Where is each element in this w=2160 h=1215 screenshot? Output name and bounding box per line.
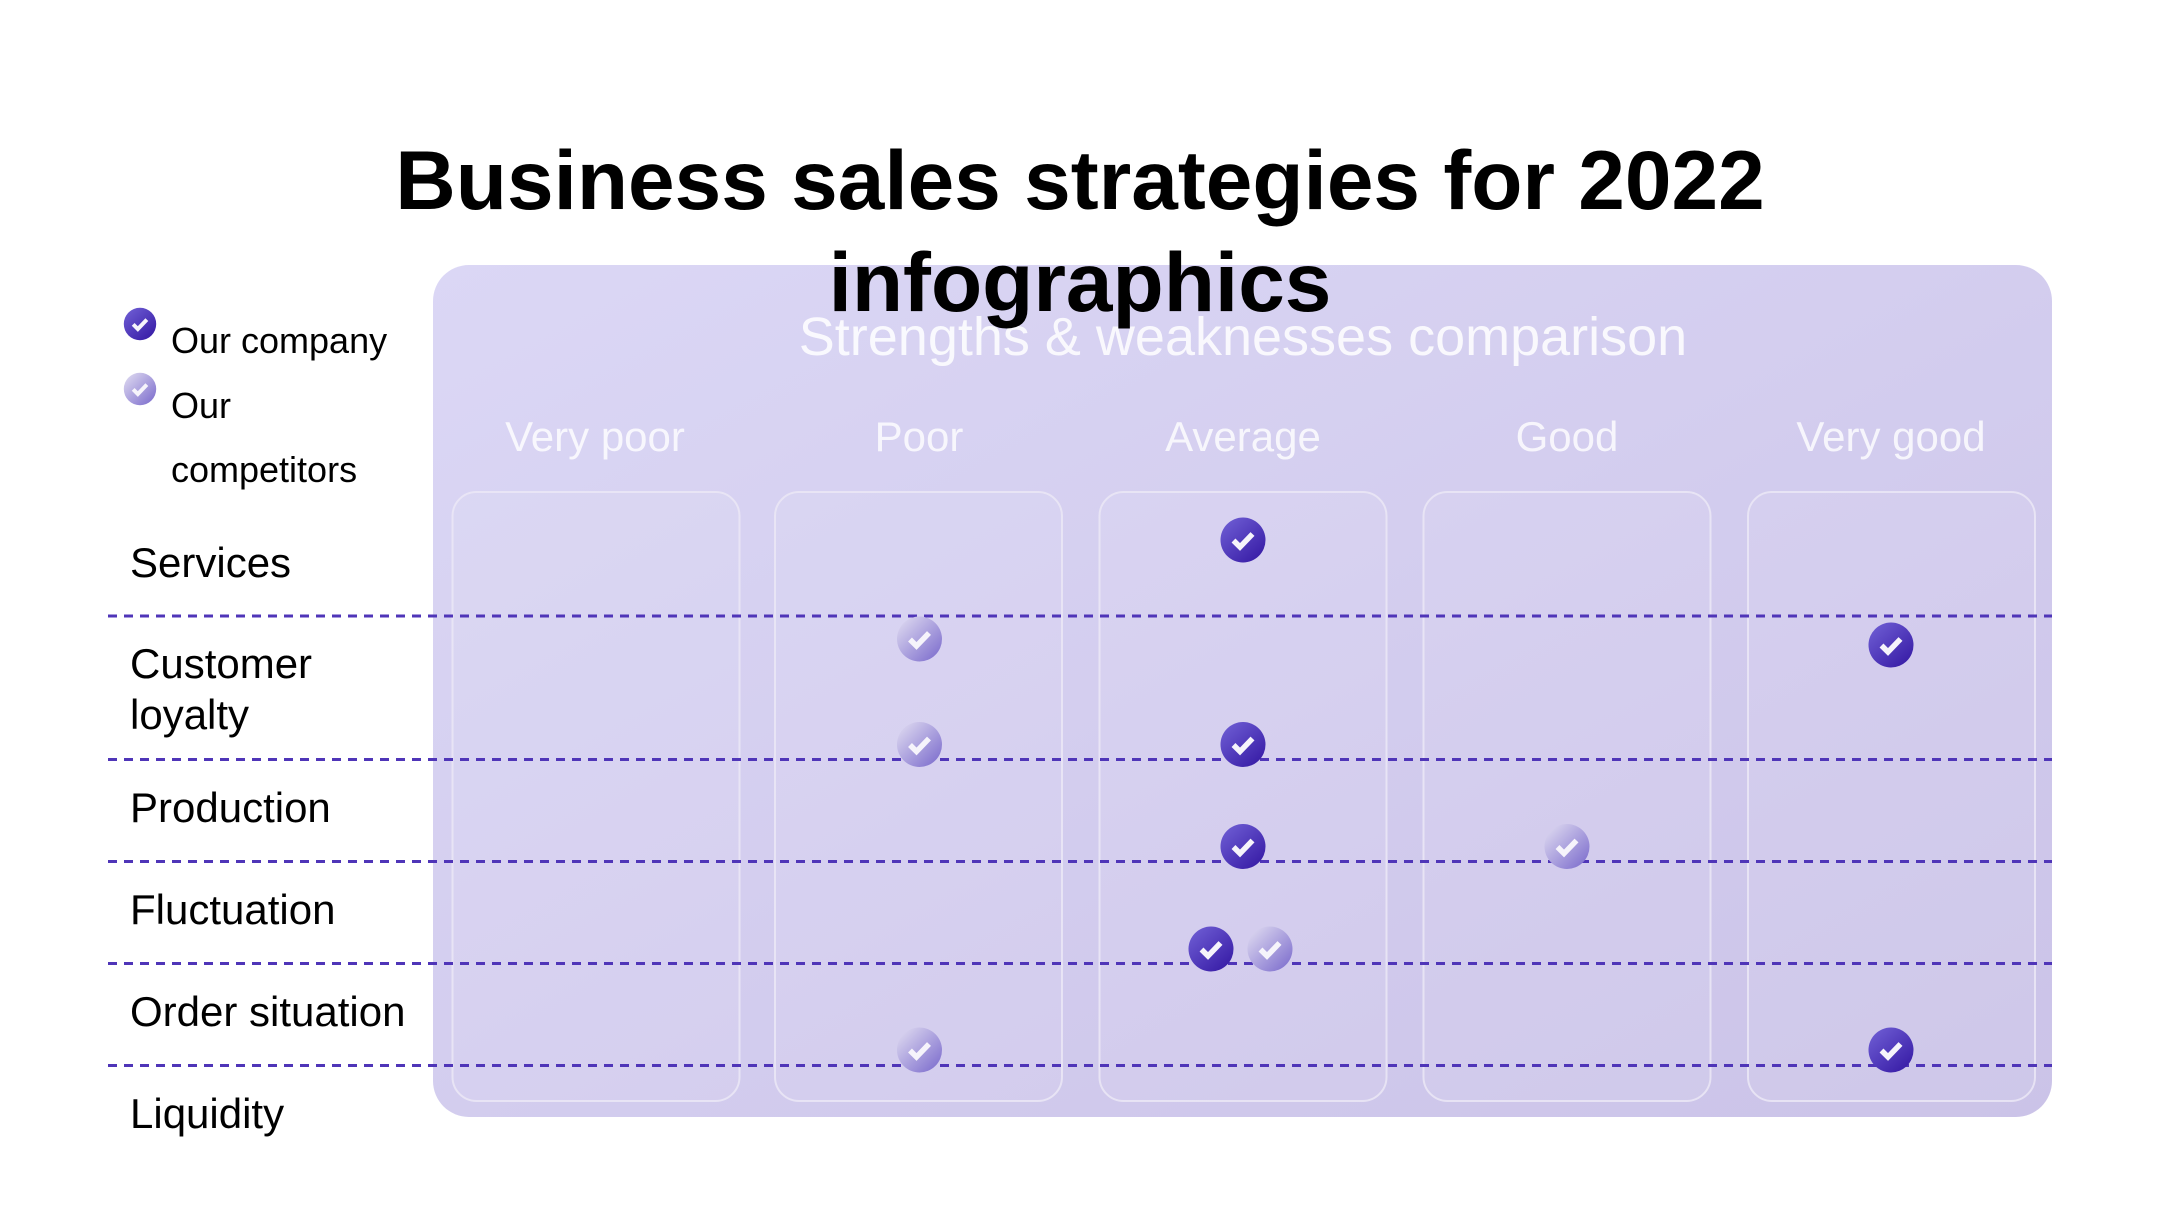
legend label: our competitors: Our [171, 385, 231, 426]
row labels: Fluctuation [130, 886, 335, 933]
marker: Fluctuation, competitors, Good [1544, 824, 1590, 869]
panel: comparison background [433, 265, 2052, 1117]
marker: Liquidity, our company, Very good [1868, 1028, 1914, 1072]
column headers [505, 413, 1986, 460]
legend [124, 308, 387, 490]
legend label: our company: Our company [171, 320, 387, 361]
rating columns [452, 492, 2035, 1101]
marker: Services, our company, Average [1220, 518, 1266, 562]
row labels: Production [130, 784, 331, 831]
marker: Order situation, our company, Average [1188, 926, 1234, 972]
column headers: Average [1165, 413, 1321, 460]
icon: our competitors [124, 373, 156, 405]
row labels: Customer [130, 640, 312, 687]
title: infographics [829, 235, 1331, 329]
row labels: loyalty [130, 691, 249, 738]
row labels: Liquidity [130, 1090, 284, 1137]
marker: Production, our company, Average [1220, 722, 1266, 767]
row labels: Services [130, 539, 291, 586]
row labels [130, 539, 405, 1137]
panel subtitle: Strengths & weaknesses comparison [799, 307, 1687, 367]
marker: Fluctuation, our company, Average [1220, 824, 1266, 869]
title [395, 133, 1765, 329]
column headers: Very good [1796, 413, 1986, 460]
marker: Customer loyalty, competitors, Poor [897, 616, 942, 662]
marker: Customer loyalty, our company, Very good [1868, 622, 1914, 668]
row divider lines [108, 616, 2052, 1066]
marker: Order situation, competitors, Average [1248, 926, 1292, 972]
title: Business sales strategies for 2022 [395, 133, 1765, 227]
column headers: Poor [875, 413, 963, 460]
column headers: Good [1516, 413, 1618, 460]
row labels: Order situation [130, 988, 405, 1035]
marker: Liquidity, competitors, Poor [897, 1028, 942, 1072]
column headers: Very poor [505, 413, 685, 460]
legend label: our competitors: competitors [171, 449, 357, 490]
icon: our company [124, 308, 156, 340]
marker: Production, competitors, Poor [897, 722, 942, 767]
legend label: our competitors [171, 385, 357, 490]
